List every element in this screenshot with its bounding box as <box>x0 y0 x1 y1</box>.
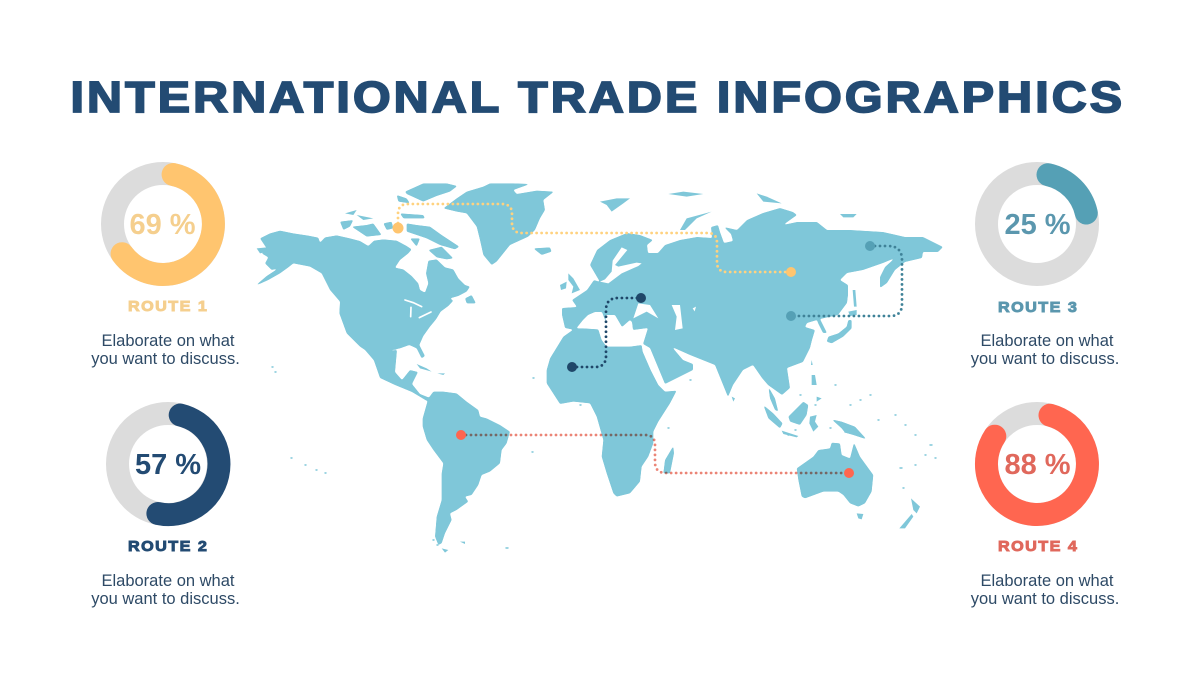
donut track 69 <box>112 174 214 274</box>
map: Oceania islands <box>782 431 920 528</box>
map: European islands <box>560 273 580 293</box>
map: Eurasia <box>562 208 943 397</box>
map: Australia <box>797 419 873 507</box>
map: Africa <box>547 328 677 497</box>
map: North America and Arctic <box>255 183 554 370</box>
panel: route 2 <box>91 414 240 608</box>
panel: route 1 <box>91 174 240 368</box>
map: Mexico and Central America <box>372 350 430 401</box>
map: Borneo and Sumatra <box>763 320 852 428</box>
route 4 description: Elaborate on what <box>980 572 1114 590</box>
donut track 88 <box>986 414 1088 514</box>
route 1 description: you want to discuss. <box>91 350 240 368</box>
map: inland seas <box>600 247 696 330</box>
route 1 end point <box>786 267 796 277</box>
route 4 description: you want to discuss. <box>971 590 1119 608</box>
route 3 description: you want to discuss. <box>971 350 1119 368</box>
map: Great Lakes <box>405 300 431 318</box>
map: small islands <box>272 367 936 548</box>
route 2 description: Elaborate on what <box>101 572 235 590</box>
route 3 end point <box>786 311 796 321</box>
donut arc 57 <box>158 415 219 515</box>
route 1 line <box>398 204 788 272</box>
route 3 line <box>791 246 902 316</box>
percentage 57: 57 % <box>135 449 201 481</box>
route 2 heading: ROUTE 2 <box>128 539 207 555</box>
donut track 25 <box>986 174 1088 274</box>
world map <box>255 183 943 553</box>
donut track 57 <box>118 414 218 514</box>
route 4 end point <box>844 468 854 478</box>
donut arc 25 <box>1048 175 1086 213</box>
panel: route 4 <box>971 414 1119 608</box>
percentage 88: 88 % <box>1004 449 1071 481</box>
route 4 start point <box>456 430 466 440</box>
donut arc 69 <box>122 174 213 274</box>
route 2 line <box>572 298 641 367</box>
map: Caribbean and southern islands <box>417 364 465 553</box>
panel: route 3 <box>971 174 1119 368</box>
map: Arctic Eurasian islands <box>600 192 857 230</box>
title: INTERNATIONAL TRADE INFOGRAPHICS <box>70 72 1122 122</box>
map: South America <box>423 392 510 545</box>
route 3 heading: ROUTE 3 <box>998 300 1077 316</box>
route 2 end point <box>636 293 646 303</box>
route 4 heading: ROUTE 4 <box>998 539 1077 555</box>
route 1 heading: ROUTE 1 <box>128 299 207 315</box>
route 2 start point <box>567 362 577 372</box>
route 4 line <box>461 435 849 473</box>
percentage 69: 69 % <box>129 209 196 241</box>
donut arc 88 <box>986 415 1087 514</box>
route 1 start point <box>392 222 404 234</box>
route 2 description: you want to discuss. <box>91 590 240 608</box>
map: East Asian islands <box>732 290 857 432</box>
map: thin islands of the Arctic Americas <box>257 210 373 253</box>
route 1 description: Elaborate on what <box>101 332 235 350</box>
percentage 25: 25 % <box>1004 209 1071 241</box>
route 3 description: Elaborate on what <box>980 332 1114 350</box>
map: main land masses <box>255 183 943 545</box>
route 3 start point <box>865 241 875 251</box>
